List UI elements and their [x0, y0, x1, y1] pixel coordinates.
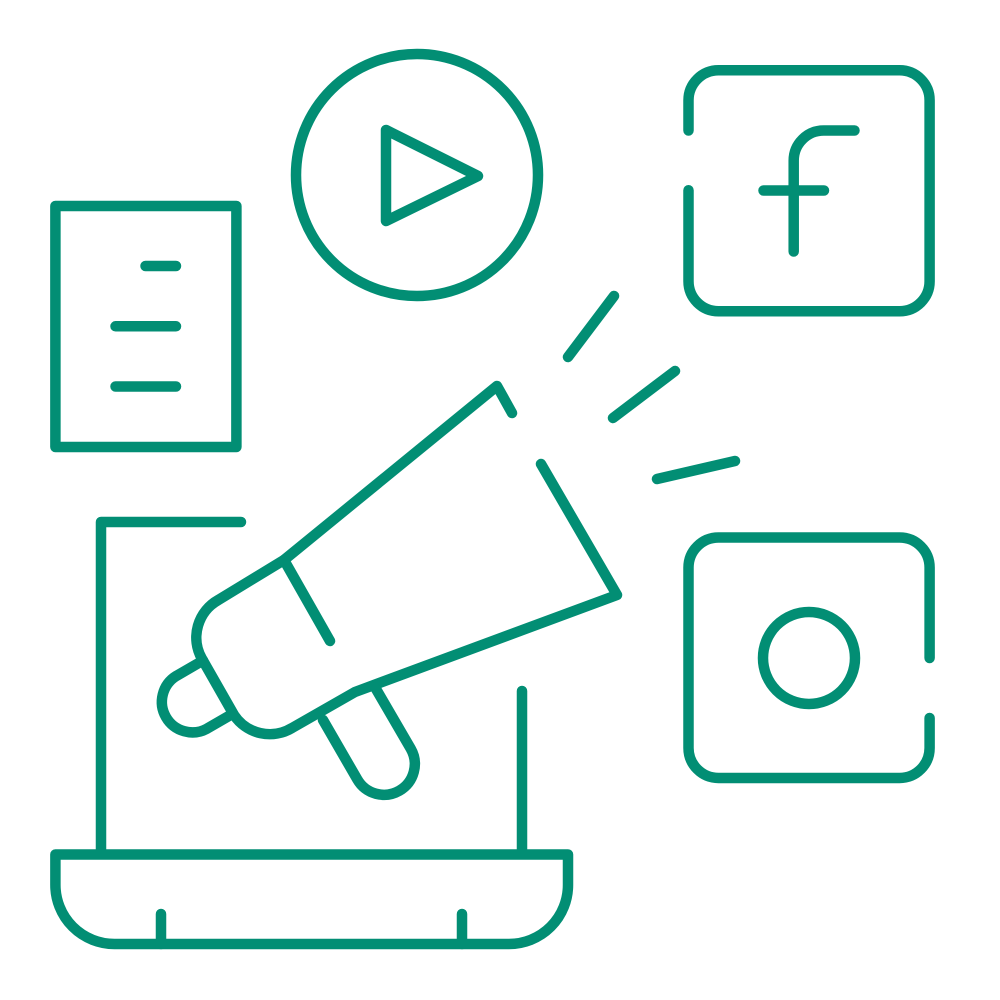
icon: document — [55, 206, 236, 447]
icon: play button — [296, 54, 538, 296]
icon: laptop — [55, 522, 568, 944]
icon: instagram card — [688, 538, 930, 778]
icon: sound lines — [568, 296, 735, 479]
icon: megaphone — [162, 386, 617, 795]
icon: facebook card — [688, 70, 930, 311]
